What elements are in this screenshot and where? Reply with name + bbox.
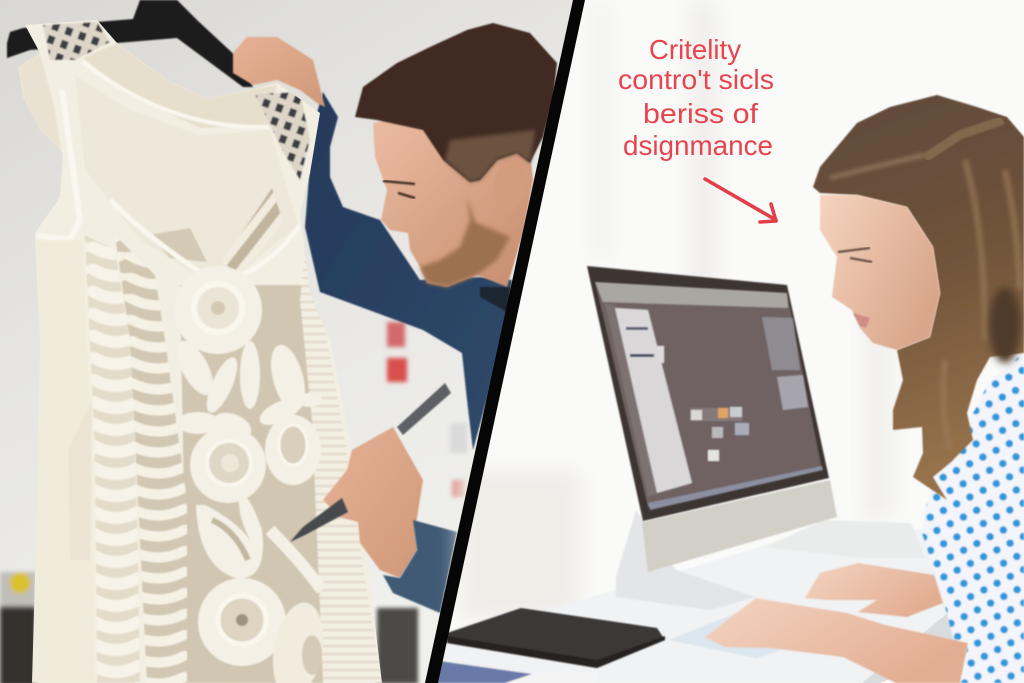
- node swatch orange: [718, 408, 728, 418]
- screen main area: [595, 282, 822, 507]
- callout line 3: beriss of: [643, 98, 758, 129]
- bodice lace: [75, 75, 298, 290]
- node swatch blue-grey: [735, 423, 749, 435]
- printed sheet: [436, 660, 598, 683]
- node swatch grey: [712, 427, 723, 438]
- bright curtain background: [436, 0, 1024, 683]
- inner scallop column: [85, 235, 140, 683]
- eye and brow: [838, 248, 872, 262]
- curtain folds: [460, 0, 894, 620]
- man's denim shirt: [305, 92, 512, 450]
- medallion middle: [190, 427, 266, 503]
- left ruffle sleeve: [18, 53, 62, 155]
- lower right lace curve: [266, 530, 330, 683]
- wall background: [0, 0, 580, 683]
- panel: right photo, designer at monitor: [436, 0, 1024, 683]
- woman's hair: [813, 95, 1024, 500]
- pen lower barrel and tip: [290, 498, 348, 542]
- denim cuff: [383, 520, 457, 613]
- shoulder lattice right: [255, 92, 310, 180]
- black diagonal divider: [425, 0, 585, 683]
- woman's face: [820, 195, 940, 350]
- monitor screen: [595, 282, 823, 510]
- neckline lace band: [83, 43, 277, 128]
- blurred shelf and objects: [0, 572, 418, 683]
- eye and brow: [383, 181, 415, 198]
- hanger: [7, 0, 253, 87]
- hair streaks: [943, 160, 1020, 450]
- paisley leaf: [196, 490, 263, 578]
- window title bar: [595, 282, 788, 308]
- man's hair: [355, 23, 557, 182]
- red and grey notes on wall: [387, 322, 467, 497]
- central beige mesh panel: [180, 285, 340, 683]
- right net border: [300, 250, 382, 683]
- back hand: [805, 563, 943, 617]
- hair fade near ear: [445, 130, 535, 182]
- callout line 2: contro't sicls: [618, 64, 774, 95]
- woman's blouse: [922, 353, 1024, 683]
- oval medallion right: [265, 415, 321, 485]
- panel labels: [626, 327, 648, 330]
- left lace side: [50, 240, 74, 244]
- bodice stripes: [226, 188, 280, 270]
- monitor bezel: [587, 266, 829, 521]
- right palette top: [762, 317, 800, 370]
- monitor chin: [642, 480, 837, 572]
- man's neck and face: [373, 110, 533, 287]
- leaf cluster one: [180, 340, 261, 435]
- pen upper barrel: [397, 383, 451, 435]
- node row: [690, 408, 742, 421]
- left scallop column: [115, 235, 187, 683]
- ear: [491, 152, 529, 214]
- medallion upper: [174, 266, 262, 354]
- callout line 1: Critelity: [649, 34, 741, 65]
- callout line 4: dsignmance: [623, 130, 773, 161]
- hand holding hanger: [233, 37, 325, 107]
- shoulder lattice left: [43, 22, 110, 60]
- braid: [925, 120, 1003, 158]
- bottom status bar: [648, 466, 823, 510]
- medallion lower: [198, 578, 286, 666]
- arrow pointing to designer: [705, 179, 776, 222]
- white side panel: [615, 308, 692, 493]
- front hand and forearm: [705, 598, 968, 683]
- tool strip: [605, 303, 657, 497]
- dress base: [18, 20, 382, 683]
- node swatch white: [691, 410, 702, 420]
- panel: left photo, inspecting lace dress: [0, 0, 580, 683]
- beard: [420, 197, 510, 287]
- hair highlight: [830, 155, 925, 178]
- floating widget: [657, 346, 664, 363]
- shirt collar: [480, 287, 510, 312]
- hair shadow: [989, 287, 1021, 363]
- leaf cluster two: [259, 344, 322, 426]
- shade under desk: [862, 612, 960, 683]
- monitor stand: [616, 510, 756, 610]
- lips: [853, 313, 870, 328]
- trackpad: [669, 607, 800, 658]
- neckline and bust seams: [38, 62, 300, 282]
- desk: [436, 525, 950, 683]
- node swatch light: [730, 407, 742, 417]
- bodice mesh: [150, 228, 207, 262]
- black notebook: [447, 608, 665, 668]
- lace dress: [18, 20, 382, 683]
- callout: red label: [618, 34, 774, 161]
- hand holding pen: [323, 427, 423, 578]
- right palette bottom: [777, 375, 808, 410]
- raised white box on desk: [765, 520, 925, 558]
- node swatch pale: [708, 450, 719, 461]
